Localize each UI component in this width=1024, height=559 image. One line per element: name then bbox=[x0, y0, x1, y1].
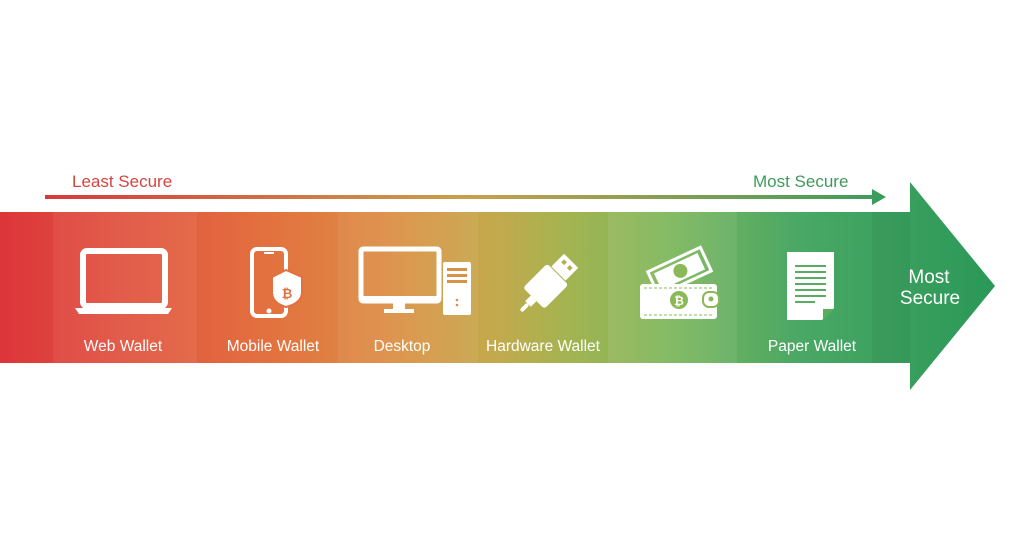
label: Most Secure (top): Most Secure bbox=[753, 172, 848, 191]
top scale arrow bbox=[45, 189, 886, 205]
panel: cold wallet (wallet with cash) bbox=[640, 247, 719, 319]
panel: paper wallet: Paper Wallet bbox=[768, 338, 857, 355]
panel: hardware wallet: Hardware Wallet bbox=[486, 338, 601, 355]
panel: paper wallet bbox=[768, 252, 857, 355]
panel: mobile wallet bbox=[227, 249, 320, 355]
panel: mobile wallet: Mobile Wallet bbox=[227, 338, 320, 355]
arrowhead label: Most Secure: Most bbox=[908, 267, 950, 288]
icon: wallet with bitcoin: ₿ bbox=[674, 294, 684, 308]
panel: web wallet bbox=[75, 251, 172, 355]
panel: desktop bbox=[361, 249, 471, 355]
main gradient arrow bbox=[0, 182, 995, 390]
icon: laptop bbox=[75, 251, 172, 314]
panel: hardware wallet bbox=[486, 250, 601, 355]
panel: web wallet: Web Wallet bbox=[84, 338, 163, 355]
panel: desktop: Desktop bbox=[374, 338, 430, 355]
icon: usb stick bbox=[510, 250, 582, 322]
icon: paper document bbox=[787, 252, 834, 320]
arrowhead label: Most Secure: Secure bbox=[900, 288, 960, 309]
icon: desktop computer bbox=[361, 249, 471, 315]
label: Least Secure: Least Secure bbox=[72, 172, 172, 191]
icon: phone with shield: ₿ bbox=[282, 286, 292, 301]
